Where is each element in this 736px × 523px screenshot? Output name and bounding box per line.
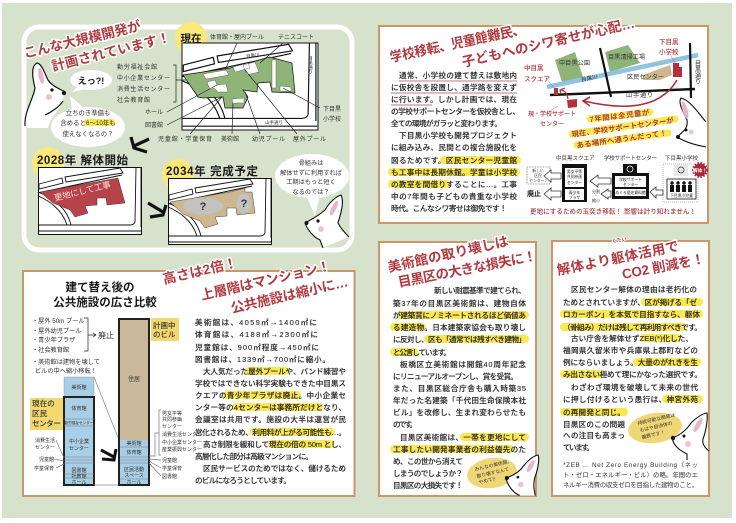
arrow: to 2034: [148, 203, 166, 217]
chart: current centre stack: 体育館: [71, 405, 87, 412]
body text: facility shrinkage: 会議室は共用です。施設の大半は運営が民: [195, 414, 346, 424]
panel: public facility comparison: [23, 254, 354, 496]
map labels: 児童館・学童保育: [158, 135, 212, 143]
map: area around Nakameguro: 目黒川: [581, 74, 598, 84]
heading: large redevelopment: こんな大規模開発が: [22, 17, 143, 61]
heading: great loss for Meguro: 目黒区の大きな損失に！: [397, 247, 538, 290]
icon: rabbit: [671, 413, 709, 460]
right labels: 共同参画: [162, 416, 182, 423]
heading: great loss for Meguro: 美術館の取り壊しは: [386, 233, 510, 275]
badge: demolition burst: [693, 164, 707, 176]
new centre box: 新しい: [532, 168, 544, 173]
body text: CO2: [563, 284, 702, 452]
body text: CO2: への注目も高まっ: [563, 430, 625, 440]
box: Nakameguro Square: プラザ: [569, 195, 580, 200]
box: Nakameguro Square: 共同参画: [567, 174, 582, 179]
map: area around Nakameguro: 目黒通り: [694, 60, 701, 85]
map labels: 山手通り: [265, 119, 283, 126]
heading: children bear the burden: 学校移転、児童館難民、: [388, 21, 527, 65]
body text: facility shrinkage: 図書館は、1339㎡→700㎡に縮小。: [195, 354, 330, 364]
body text: facility shrinkage: 高層化した部分は高級マンションに。: [195, 451, 313, 461]
speech bubble: sustainability: もはや自治体の: [639, 420, 673, 434]
flow diagram: domino relocation: 分割: [592, 188, 600, 194]
body text: facility shrinkage: 学校ではできない科学実験もできた中目黒ス: [195, 378, 346, 388]
connector lines: [94, 377, 119, 485]
body text: facility shrinkage: 美術館は、4059㎡→1400㎡に: [195, 317, 317, 327]
chart: current centre stack: 社教館: [71, 473, 87, 480]
right labels: 消費生活センター: [162, 431, 202, 438]
chart: current centre stack: 図書館: [71, 467, 87, 474]
body text: art museum: にリニューアルオープンし、賞を受賞。: [393, 371, 518, 381]
body text: school rebuilding: 中の7年間も子どもの貴重な小学校: [391, 191, 517, 201]
map labels: 美術館: [221, 135, 239, 143]
map labels: 下目黒: [323, 106, 341, 113]
abolished facilities list: [32, 317, 114, 375]
flow diagram: domino relocation: [527, 154, 707, 216]
chart: current centre stack: 中小企業: [69, 438, 89, 445]
box: Nakameguro Square: 男女平等: [567, 169, 582, 174]
label: current centre: センター: [32, 419, 61, 428]
body text: school rebuilding: [391, 70, 520, 213]
callout: children commute: 7年間は全児童が: [589, 108, 650, 124]
body text: art museum: しまうのでしょうか？: [393, 469, 463, 478]
chart: current centre stack: ホール: [71, 480, 87, 486]
map: 2028 cleared site: [38, 167, 142, 234]
footnote: ZEB: ネルギー消費の収支ゼロを目指した建物のこと。: [563, 480, 698, 489]
body text: school rebuilding: も工事中は長期休館。学童は小学校: [391, 167, 517, 177]
flow diagram: domino relocation: ・: [594, 193, 598, 198]
speech bubble: reuse skeleton: 解体せずに利用すれば: [280, 169, 343, 177]
speech bubble: stop demolition: やめて!!: [478, 475, 496, 486]
abolished facilities list: ・屋外 50m プール: [32, 317, 85, 325]
abolished facilities list: ・美術館は建物を壊して: [32, 358, 100, 366]
abolished facilities list: ・青少年プラザ: [32, 336, 75, 344]
body text: school rebuilding: に組み込み、民間との複合施設化を: [391, 142, 517, 152]
body text: art museum: る建造物。日本建築家協会も取り壊し: [393, 322, 526, 332]
body text: art museum: め、この世から消えて: [393, 456, 463, 466]
box: school support centre: センター: [623, 182, 638, 187]
speech bubble: sustainability: 持続可能な開発は: [637, 411, 676, 427]
map: area around Nakameguro: [524, 38, 701, 128]
right labels: 男女平等: [162, 410, 182, 417]
map labels: 消費生活センター: [117, 85, 170, 93]
body text: facility shrinkage: 体育館は、4188㎡→2300㎡に: [195, 329, 318, 339]
body text: facility shrinkage: 大人気だった屋外プールや、バンド練習や: [203, 366, 346, 376]
map: area around Nakameguro: 現・学校サポート: [528, 110, 576, 118]
heading: taller, condos on top: 上層階はマンション！: [199, 258, 332, 303]
chart title: [53, 280, 157, 309]
label: planned building: のビル: [153, 329, 176, 339]
badge: demolition burst: 解体！: [693, 167, 707, 174]
chart title: 公共施設の広さ比較: [53, 295, 157, 309]
map labels: 勤労福祉会館: [117, 63, 157, 71]
body text: CO2: み出さない極めて理にかなった選択です。: [563, 369, 702, 379]
new centre box: 廃止: [527, 189, 541, 198]
footnote: ZEB: ト・ゼロ・エネルギー・ビル）の略。年間のエ: [563, 470, 698, 479]
body text: CO2: （骨組み）だけは残して再利用すべきです。: [563, 322, 702, 332]
map: 2034 unknown site: ?: [200, 201, 207, 213]
panel: art museum: [379, 233, 539, 496]
badge: current: [175, 22, 207, 54]
heading: children bear the burden: 子どもへのシワ寄せが心配…: [460, 15, 636, 70]
map: area around Nakameguro: 小学校: [659, 47, 679, 56]
body text: art museum: [393, 285, 526, 490]
box: Nakameguro Square: [562, 164, 587, 202]
body text: CO2: ロカーボン」を本気で目指すなら、躯体: [563, 309, 700, 319]
icon: rabbit: [676, 98, 706, 147]
body text: facility shrinkage: のビルになろうとしています。: [195, 475, 291, 485]
heading: reuse skeleton to cut CO2: CO2 削減を！: [621, 250, 706, 282]
speech bubble: reuse skeleton: 工期はもっと短く: [286, 178, 336, 186]
body text: art museum: に反対し、区も「通常では残すべき建物」: [393, 334, 526, 344]
label: current centre: [30, 398, 63, 430]
body text: CO2: 古い庁舎を解体せずZEB(*)化した、: [571, 333, 693, 343]
speech bubble: worry about closure: 含めると6〜10年も: [60, 118, 116, 127]
body text: facility shrinkage: 区民サービスのためではなく、儲けるため: [203, 463, 346, 473]
speech bubble: reuse skeleton: [275, 154, 349, 216]
chart: planned building stack: スペース: [124, 473, 144, 479]
body text: CO2: の再開発と同じ。: [563, 407, 625, 417]
map: 2034 unknown site: ?: [241, 198, 248, 210]
map labels: 体育館・屋内プール: [210, 33, 264, 41]
heading: 2034 planned completion: [162, 159, 258, 191]
body text: CO2: 目黒区のこの問題: [563, 420, 625, 429]
abolished facilities list: ・社会教育館: [32, 346, 69, 354]
heading: 2034 planned completion: 2034年 完成予定: [166, 164, 258, 178]
box: Nakameguro Square: 青少年: [569, 190, 580, 195]
map: area around Nakameguro: 下目黒: [659, 38, 679, 46]
body text: art museum: ビル」を改修し、生まれ変わらせたも: [393, 407, 526, 417]
chart: current centre stack: センター: [69, 445, 89, 452]
heading: taller, condos on top: [161, 254, 350, 316]
abolished facilities list: ・屋外幼児プール: [32, 327, 82, 335]
map: area around Nakameguro: 中目黒公園: [559, 59, 590, 67]
label: current centre: 現在の: [32, 398, 55, 408]
chart: planned building stack: [119, 319, 149, 486]
map: current site: [117, 33, 341, 143]
body text: art museum: 新しい耐震基準で建てられ、: [434, 285, 526, 295]
new centre box: 区民: [534, 173, 542, 178]
speech bubble: worry about closure: 使えなくなるの？: [62, 129, 114, 138]
speech bubble: stop demolition: 取り壊すなんて: [476, 466, 510, 480]
icon: rabbit surprised: [25, 63, 66, 128]
callout: children commute: 現在、学校サポートセンターが: [571, 116, 675, 139]
arrow: to 2028: [131, 137, 149, 152]
chart: current centre stack: [64, 377, 94, 486]
arrow: current to planned: [101, 449, 116, 460]
chart title: 建て替え後の: [66, 280, 134, 294]
body text: CO2: わざわざ環境を破壊して未来の世代: [571, 382, 698, 392]
body text: facility shrinkage: クエアの青少年プラザは廃止。中小企業セ: [195, 390, 346, 400]
chart: planned building stack: ホール: [126, 480, 142, 486]
label: current centre: 区民: [32, 409, 48, 418]
body text: art museum: 工事したい開発事業者の利益優先のた: [393, 444, 526, 454]
box: Shimomeguro elementary: 下目黒小児童: [670, 193, 693, 198]
left labels: [34, 437, 64, 472]
body text: art museum: 築37年の目黒区美術館は、建物自体: [393, 298, 526, 308]
map labels: 中小企業センター: [117, 74, 170, 82]
speech bubble: stop demolition: [465, 455, 519, 491]
map labels: 目黒通り: [308, 56, 314, 75]
map labels: 小学校: [323, 115, 341, 123]
right labels: 中小企業センター: [162, 439, 202, 446]
body text: school rebuilding: 全ての環境がガラッと変わります。: [391, 118, 502, 128]
body text: CO2: ています。: [563, 443, 594, 452]
chart: current centre stack: 美術館: [71, 384, 87, 391]
box: Nakameguro Square: センター: [567, 180, 582, 185]
speech bubble: worry about closure: [51, 96, 125, 147]
map: area around Nakameguro: センター: [540, 120, 564, 128]
body text: art museum: また、目黒区総合庁舎も購入時築35: [393, 383, 526, 393]
panel: school relocation: [379, 15, 708, 223]
footnote: ZEB: *ZEB … Net Zero Energy Building（ネッ: [563, 461, 698, 469]
body text: school rebuilding: の学校サポートセンターを仮校舎とし、: [391, 106, 520, 116]
box: Shimomeguro elementary: [663, 164, 698, 202]
arrows: move flow: [544, 170, 663, 200]
chart: planned building stack: 美術館: [126, 440, 142, 447]
flow diagram: domino relocation: 縮小: [592, 197, 600, 203]
panel: redevelopment plan timeline: [22, 17, 352, 250]
map labels: 屋外プール: [293, 135, 326, 143]
map: area around Nakameguro: 区民センター: [627, 73, 664, 81]
heading: great loss for Meguro: [386, 233, 538, 290]
right labels: 学童保育: [162, 465, 182, 472]
body text: art museum: 板橋区立美術館は開館40周年記念: [400, 359, 526, 369]
callout: children commute: ある場所へ通うんだって！: [576, 128, 667, 150]
icon: rabbit: [505, 455, 539, 495]
label: planned building: 計画中: [153, 320, 176, 330]
abolished facilities list: ビルの中へ縮小移転！: [35, 367, 97, 375]
heading: reuse skeleton to cut CO2: くたい: [611, 235, 627, 245]
new centre box: [527, 167, 550, 198]
caption: 更地にするための玉突き移転！ 影響は計り知れません！: [530, 206, 696, 216]
body text: art museum: のです。: [393, 420, 417, 429]
map labels: 図書館: [145, 121, 163, 129]
speech bubble: surprise: [70, 70, 112, 92]
body text: art museum: が建築賞にノミネートされるほど価値あ: [393, 310, 526, 320]
chart: planned building stack: 区民活動: [124, 466, 144, 473]
footnote: ZEB: [563, 461, 698, 489]
body text: art museum: と公言しています。: [393, 348, 451, 357]
body text: CO2: 区民センター解体の理由は老朽化の: [571, 284, 697, 294]
body text: art museum: 年だった名建築「千代田生命保険本社: [393, 395, 526, 405]
speech bubble: sustainability: [626, 409, 684, 447]
icon: rabbit thinking: [304, 195, 349, 248]
heading: 2028 demolition: 2028年 解体開始: [37, 153, 128, 167]
box: school support centre: 学校サポート: [619, 177, 642, 182]
heading: taller, condos on top: 高さは2倍！: [161, 254, 239, 287]
body text: facility shrinkage: ンター等の4センターは事務所だけとなり、: [195, 402, 346, 412]
body text: CO2: 例にならいましょう。大量のがれきを生: [563, 357, 698, 367]
body text: CO2: に押し付けるという愚行は、神宮外苑: [563, 394, 698, 404]
right labels: センター: [162, 423, 182, 430]
body text: art museum: 目黒区美術館は、一帯を更地にして: [400, 432, 526, 442]
speech bubble: surprise: えっ?!: [78, 76, 104, 86]
map labels: 幼児プール: [252, 135, 285, 143]
heading: taller, condos on top: 公共施設は縮小に…: [229, 273, 350, 316]
body text: facility shrinkage: 高さ制限を緩和して現在の倍の 50m とし、: [203, 439, 346, 449]
map: area around Nakameguro: 中目黒: [524, 63, 544, 72]
right labels: [149, 410, 202, 480]
heading: large redevelopment: 計画されています！: [50, 30, 172, 74]
left labels: センター: [35, 444, 55, 451]
chart: current centre stack: 勤労福祉センター: [65, 420, 94, 425]
body text: art museum: 目黒区の大損失です！: [393, 480, 463, 490]
body text: school rebuilding: に行います。しかし計画では、現在: [391, 94, 517, 104]
body text: facility shrinkage: 営化されるため、利用料が上がる可能性も…。: [195, 427, 346, 437]
box: school support centre: [612, 164, 649, 199]
left labels: 消費生活: [35, 437, 55, 444]
flow diagram: domino relocation: 中目黒スクエア: [556, 154, 595, 162]
speech bubble: stop demolition: みんなの美術館、: [474, 457, 513, 473]
heading: large redevelopment: [22, 17, 172, 74]
heading: reuse skeleton to cut CO2: 解体より躯体活用で: [555, 238, 680, 278]
right labels: 産業振興センター: [162, 446, 202, 453]
body text: CO2: ためとされていますが、区が掲げる「ゼ: [563, 297, 697, 307]
body text: school rebuilding: の教室を間借りすることに…。工事: [391, 179, 517, 189]
heading: 2028 demolition: [32, 147, 128, 179]
map: area around Nakameguro: 山手通り: [626, 91, 653, 99]
speech bubble: reuse skeleton: 骨組みは: [299, 159, 323, 167]
body text: school rebuilding: 通常、小学校の建て替えは敷地内: [399, 70, 517, 80]
badge: current: 現在: [180, 32, 202, 45]
map: area around Nakameguro: スクエア: [524, 75, 550, 83]
new centre box: センター?: [529, 178, 547, 183]
map labels: 社会教育館: [117, 96, 150, 104]
heading: children bear the burden: [388, 15, 636, 70]
label: planned building: [151, 318, 179, 341]
abolished facilities list: 廃止: [98, 330, 114, 340]
body text: school rebuilding: 図るためです。区民センター児童館: [391, 155, 517, 165]
box: school support centre: めぐろ歴史資料館: [615, 190, 646, 195]
body text: CO2: 福岡県久留米市や兵庫県上郡町などの: [563, 345, 698, 355]
left labels: 学童保育: [34, 465, 54, 472]
map labels: [117, 33, 341, 143]
callout: children commute: [571, 108, 675, 150]
speech bubble: reuse skeleton: なるのでは？: [292, 189, 330, 196]
speech bubble: sustainability: 義務です！: [641, 429, 666, 441]
map: area around Nakameguro: 目黒清掃工場: [608, 53, 645, 61]
body text: facility shrinkage: [195, 317, 346, 485]
body text: facility shrinkage: 児童館は、900㎡程度→450㎡に: [195, 342, 319, 352]
flow diagram: domino relocation: 学校サポートセンター: [604, 154, 657, 162]
map: 2028 cleared site: 更地にして工事: [53, 179, 112, 203]
body text: school rebuilding: 下目黒小学校も開発プロジェクト: [399, 130, 517, 140]
panel: CO2 reduction: [552, 235, 709, 496]
flow diagram: domino relocation: 下目黒小学校: [665, 154, 698, 162]
right labels: 児童館: [162, 457, 177, 464]
left labels: 児童館: [39, 456, 54, 463]
speech bubble: worry about closure: 立ちのき準備も: [66, 108, 110, 117]
map labels: ホール: [145, 109, 163, 116]
body text: school rebuilding: 時代。こんなシワ寄せは御免です！: [391, 203, 507, 213]
map labels: テニスコート: [278, 34, 314, 41]
map: 2034 unknown site: [168, 178, 272, 244]
right labels: 図書館: [162, 473, 177, 480]
map labels: 目黒川: [246, 52, 260, 60]
body text: school rebuilding: に仮校舎を設置し、通学路を変えず: [391, 82, 517, 92]
chart: planned building stack: 体育館: [126, 449, 142, 456]
chart: planned building stack: 住居: [128, 375, 140, 383]
